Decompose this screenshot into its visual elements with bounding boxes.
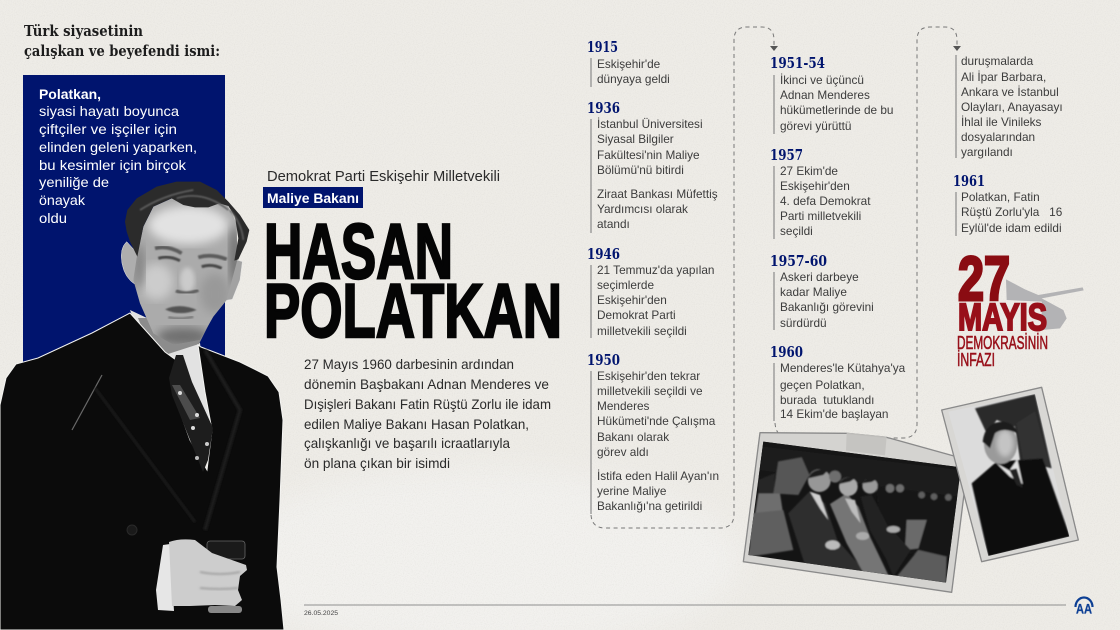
entry: 1936: Fakültesi'nin Maliye (597, 148, 700, 162)
entry: 1936: İstanbul Üniversitesi (597, 117, 703, 131)
entry: 1950: görev aldı (597, 445, 649, 459)
timeline: column 3 (953, 54, 1063, 236)
portrait of Hasan Polatkan (0, 182, 284, 630)
entry: 1951-54: görevi yürüttü (780, 119, 851, 133)
portrait: ears (121, 242, 242, 301)
footer rule (304, 604, 1066, 606)
entry: 1957-60: Askeri darbeye (780, 270, 859, 284)
label: minister: Maliye Bakanı (267, 190, 359, 206)
panel: blue summary box: bu kesimler için birçok (39, 158, 186, 173)
panel: blue summary box: elinden geleni yaparken, (39, 140, 197, 155)
entry: 1950: milletvekili seçildi ve (597, 384, 703, 398)
entry: 1960: 1960 (770, 344, 803, 361)
entry: 1936: 1936 (587, 100, 620, 117)
entry: 1951-54: 1951-54 (770, 55, 825, 72)
entry: 1951-54: hükümetlerinde de bu (780, 103, 893, 117)
logo: AA (1076, 598, 1092, 616)
entry: 1950: Hükümeti'nde Çalışma (597, 414, 716, 428)
entry: 1950: yerine Maliye (597, 484, 667, 498)
entry: 1946 (587, 246, 714, 338)
entry: 1960 continued (956, 54, 1063, 159)
portrait: shirt cuff (156, 544, 174, 611)
portrait: tie (169, 355, 213, 472)
heading: top left: Türk siyasetinin (24, 22, 143, 40)
text block: intro paragraph: Dışişleri Bakanı Fatin Rüştü Zorlu ile idam (304, 397, 551, 412)
arrow: column 2 to column 3 (775, 27, 961, 438)
title: name: HASAN (264, 207, 453, 295)
entry: 1951-54: Adnan Menderes (780, 88, 870, 102)
panel: blue summary box: çiftçiler ve işçiler için (39, 122, 177, 137)
entry: 1960 continued: Olayları, Anayasayı (961, 100, 1063, 114)
arrow: column 1 to column 2 (591, 27, 778, 528)
entry: 1936 (587, 100, 718, 233)
panel: blue summary box: yeniliğe de (39, 175, 109, 190)
entry: 1950: Menderes (597, 399, 650, 413)
entry: 1946: 1946 (587, 246, 620, 263)
entry: 1957: 1957 (770, 147, 803, 164)
entry: 1936: Siyasal Bilgiler (597, 132, 674, 146)
entry: 1936: Yardımcısı olarak (597, 202, 688, 216)
entry: 1951-54 (770, 55, 893, 134)
entry: 1915: dünyaya geldi (597, 72, 670, 86)
photo: cabinet seated in hall (743, 433, 968, 592)
entry: 1957: 27 Ekim'de (780, 164, 838, 178)
portrait: hair (125, 182, 249, 261)
logo text: İNFAZI (957, 349, 995, 370)
entry: 1946: milletvekili seçildi (597, 324, 687, 338)
entry: 1950: Bakanlığı'na getirildi (597, 499, 702, 513)
logo text: 27 (958, 245, 1010, 314)
entry: 1960: burada tutuklandı (780, 393, 874, 407)
portrait: hand holding glass (169, 539, 247, 613)
title: name (264, 207, 562, 354)
heading: top left (24, 22, 220, 60)
footer: date: 26.05.2025 (304, 610, 338, 617)
entry: 1936: atandı (597, 217, 630, 231)
entry: 1946: 21 Temmuz'da yapılan (597, 263, 714, 277)
panel: blue summary box: siyasi hayatı boyunca (39, 104, 179, 119)
photo: Polatkan standing (942, 387, 1078, 562)
entry: 1960 continued: Ankara ve İstanbul (961, 85, 1059, 99)
logo text: DEMOKRASİNİN (957, 332, 1048, 353)
entry: 1960 (770, 344, 906, 421)
text block: intro paragraph: dönemin Başbakanı Adnan Menderes ve (304, 377, 549, 392)
logo: 27 Mayıs Demokrasinin İnfazı (957, 245, 1084, 370)
text block: intro paragraph: ön plana çıkan bir isimdi (304, 456, 450, 471)
entry: 1957: Parti milletvekili (780, 209, 861, 223)
entry: 1950: Eskişehir'den tekrar (597, 369, 700, 383)
panel: blue summary box: Polatkan, (39, 87, 101, 102)
entry: 1957-60: sürdürdü (780, 316, 827, 330)
entry: 1950: İstifa eden Halil Ayan'ın (597, 469, 719, 483)
entry: 1961: Polatkan, Fatin (961, 190, 1040, 204)
entry: 1960: 14 Ekim'de başlayan (780, 407, 888, 421)
panel: blue summary box (23, 75, 225, 365)
entry: 1960: geçen Polatkan, (780, 378, 865, 392)
entry: 1951-54: İkinci ve üçüncü (780, 73, 864, 87)
entry: 1936: Ziraat Bankası Müfettiş (597, 187, 718, 201)
entry: 1950: Bakanı olarak (597, 430, 669, 444)
entry: 1957-60: Bakanlığı görevini (780, 300, 874, 314)
portrait: lapel highlights (72, 350, 240, 530)
logo: AA: AA (1076, 600, 1092, 616)
entry: 1960 continued: yargılandı (961, 145, 1013, 159)
entry: 1950: 1950 (587, 352, 620, 369)
entry: 1960 continued: dosyalarından (961, 130, 1035, 144)
entry: 1960 continued: İhlal ile Vinileks (961, 115, 1042, 129)
entry: 1961: 1961 (953, 173, 985, 190)
text block: intro paragraph: 27 Mayıs 1960 darbesinin ardından (304, 357, 514, 372)
text block: intro paragraph: edilen Maliye Bakanı Hasan Polatkan, (304, 417, 529, 432)
panel: blue summary box: oldu (39, 211, 67, 226)
entry: 1961: Eylül'de idam edildi (961, 221, 1062, 235)
entry: 1957-60: kadar Maliye (780, 285, 847, 299)
logo text: MAYIS (958, 297, 1047, 339)
icon: tank (1006, 279, 1084, 330)
entry: 1960 continued: Ali İpar Barbara, (961, 70, 1046, 84)
entry: 1960 continued: duruşmalarda (961, 54, 1034, 68)
portrait: shirt collar base (130, 310, 212, 440)
title: name: POLATKAN (264, 269, 562, 354)
entry: 1957 (770, 147, 871, 239)
entry: 1957-60: 1957-60 (770, 253, 827, 270)
entry: 1936: Bölümü'nü bitirdi (597, 163, 684, 177)
portrait: coat button (127, 525, 137, 535)
entry: 1961: Rüştü Zorlu'yla 16 (961, 205, 1063, 219)
entry: 1915 (587, 39, 670, 87)
entry: 1946: seçimlerde (597, 278, 654, 292)
subtitle: parliament role: Demokrat Parti Eskişehir Milletvekili (267, 169, 500, 185)
timeline: column 2 (770, 55, 906, 421)
portrait: suit (0, 313, 284, 630)
panel: blue summary box: önayak (39, 193, 85, 208)
entry: 1946: Eskişehir'den (597, 293, 667, 307)
tape on photo (846, 433, 887, 455)
heading: top left: çalışkan ve beyefendi ismi: (24, 42, 220, 60)
portrait: neck (138, 318, 212, 354)
entry: 1915: 1915 (587, 39, 618, 56)
entry: 1957: 4. defa Demokrat (780, 194, 871, 208)
entry: 1957: Eskişehir'den (780, 179, 850, 193)
entry: 1961 (953, 173, 1063, 236)
entry: 1950 (587, 352, 719, 514)
timeline: column 1 (587, 39, 719, 514)
entry: 1946: Demokrat Parti (597, 308, 676, 322)
entry: 1915: Eskişehir'de (597, 57, 661, 71)
text block: intro paragraph: çalışkanlığı ve başarılı icraatlarıyla (304, 436, 510, 451)
logo text (957, 245, 1048, 370)
entry: 1960: Menderes'le Kütahya'ya (780, 361, 906, 375)
entry: 1957: seçildi (780, 224, 813, 238)
entry: 1957-60 (770, 253, 874, 330)
text block: intro paragraph (304, 357, 551, 471)
portrait: face (134, 198, 238, 344)
